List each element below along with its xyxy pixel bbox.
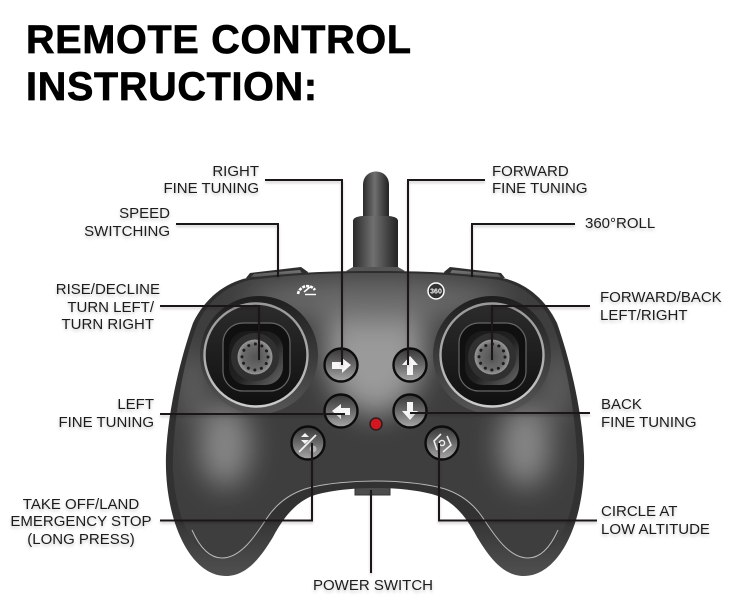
360 roll shoulder button	[444, 267, 505, 278]
label: speed switching: SPEED	[119, 205, 170, 222]
button: right arrow	[324, 348, 358, 382]
label: forward back left right: LEFT/RIGHT	[600, 307, 688, 324]
button: left arrow	[324, 394, 358, 428]
icon: speed gauge	[298, 286, 316, 294]
left joystick	[200, 296, 318, 414]
controller	[160, 172, 590, 576]
title	[26, 18, 411, 109]
label: back fine tuning: FINE TUNING	[601, 414, 697, 431]
leader lines	[160, 180, 597, 573]
label: take off land emergency stop: EMERGENCY STOP	[10, 513, 152, 530]
label: right fine tuning: FINE TUNING	[163, 180, 259, 197]
label: rise decline turn: RISE/DECLINE	[56, 281, 160, 298]
controller body	[166, 271, 584, 576]
title: REMOTE CONTROL	[26, 18, 411, 62]
label: left fine tuning: FINE TUNING	[58, 414, 154, 431]
label: circle at low altitude: LOW ALTITUDE	[601, 521, 710, 538]
controller face	[173, 273, 577, 558]
label: back fine tuning: BACK	[601, 396, 642, 413]
label: take off land emergency stop: TAKE OFF/LAND	[23, 496, 139, 513]
indicator light	[370, 418, 382, 430]
button: circle at low altitude	[426, 426, 458, 460]
label: rise decline turn: TURN LEFT/	[67, 299, 155, 316]
label: power switch: POWER SWITCH	[313, 577, 433, 594]
power switch	[355, 485, 390, 495]
icon: 360 badge: 360	[430, 288, 442, 296]
label: forward fine tuning: FORWARD	[492, 163, 569, 180]
antenna	[346, 172, 405, 278]
face highlight line	[192, 481, 558, 558]
label: circle at low altitude: CIRCLE AT	[601, 503, 677, 520]
right joystick	[433, 296, 551, 414]
label: take off land emergency stop: (LONG PRESS)	[27, 531, 135, 548]
title: INSTRUCTION:	[26, 65, 317, 109]
label: speed switching: SWITCHING	[84, 223, 170, 240]
speed switching shoulder button	[246, 267, 308, 278]
label: right fine tuning: RIGHT	[212, 163, 259, 180]
label: forward back left right: FORWARD/BACK	[600, 289, 722, 306]
button: down arrow	[394, 394, 426, 428]
button: take off and land	[292, 426, 324, 460]
label: 360 roll: 360°ROLL	[585, 215, 655, 232]
button: up arrow	[394, 348, 426, 382]
label: rise decline turn: TURN RIGHT	[62, 316, 154, 333]
label: forward fine tuning: FINE TUNING	[492, 180, 588, 197]
icon: 360 badge	[428, 283, 444, 299]
label: left fine tuning: LEFT	[117, 396, 154, 413]
